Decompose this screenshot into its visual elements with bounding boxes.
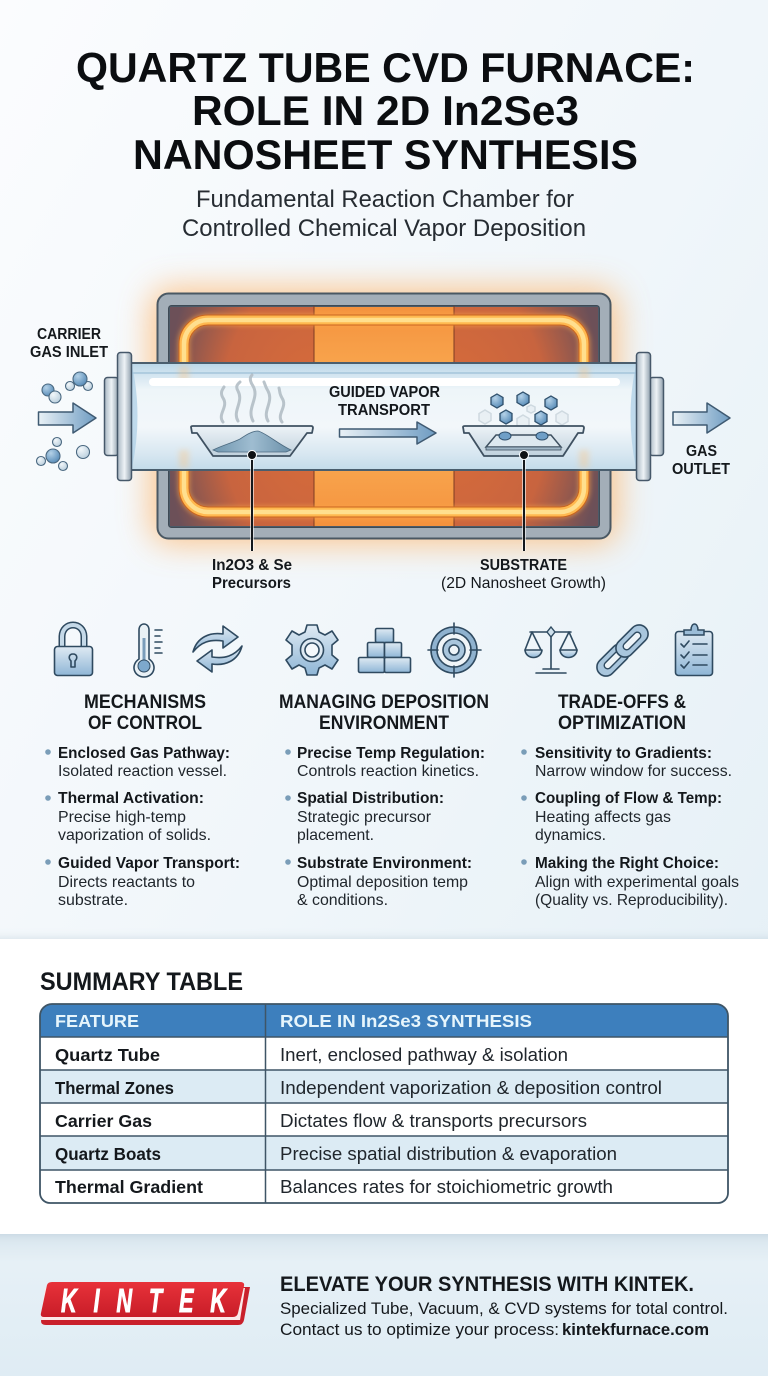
quartz tube xyxy=(130,363,638,470)
icon: gear xyxy=(286,625,338,675)
call to action: Contact us to optimize your process: xyxy=(280,1320,559,1339)
carrier gas inlet label xyxy=(30,326,108,361)
furnace diagram xyxy=(104,288,664,544)
summary table: Quartz Boats xyxy=(55,1144,161,1164)
list: trade-offs: Sensitivity to Gradients: xyxy=(535,745,712,762)
list: managing deposition: Strategic precursor xyxy=(297,809,432,826)
summary table: Inert, enclosed pathway & isolation xyxy=(280,1045,568,1065)
list: trade-offs: (Quality vs. Reproducibility). xyxy=(535,892,728,909)
icon: cycle arrows xyxy=(193,626,242,672)
list: managing deposition: placement. xyxy=(297,827,374,844)
heading: mechanisms: OF CONTROL xyxy=(88,713,202,734)
call to action: Specialized Tube, Vacuum, & CVD systems for total control. xyxy=(280,1299,728,1318)
logo: kintek xyxy=(41,1282,250,1325)
summary table: ROLE IN In2Se3 SYNTHESIS xyxy=(280,1011,532,1031)
icon: stacked blocks xyxy=(358,628,410,672)
precursor boat xyxy=(191,426,313,456)
icon: target xyxy=(428,623,481,677)
heating coil xyxy=(184,320,584,512)
logo: kintek: KINTEK xyxy=(61,1282,227,1319)
list: mechanisms: vaporization of solids. xyxy=(58,827,211,844)
icon: lock xyxy=(54,625,92,676)
carrier gas inlet label: GAS INLET xyxy=(30,344,108,361)
summary table xyxy=(40,1004,728,1203)
gas outlet label xyxy=(672,443,730,478)
guided vapor transport label: TRANSPORT xyxy=(338,402,430,419)
summary table: Quartz Tube xyxy=(55,1045,160,1065)
list: mechanisms: Enclosed Gas Pathway: xyxy=(58,745,230,762)
furnace body xyxy=(158,294,610,538)
callout: substrate: SUBSTRATE xyxy=(480,557,567,574)
gas molecules xyxy=(36,372,92,470)
call to action xyxy=(280,1273,728,1339)
heading: managing deposition: ENVIRONMENT xyxy=(319,713,449,734)
title: QUARTZ TUBE CVD FURNACE: xyxy=(76,44,695,91)
list: mechanisms: Precise high-temp xyxy=(58,809,186,826)
furnace glow xyxy=(150,288,618,544)
left flange xyxy=(104,352,132,480)
list: mechanisms: Guided Vapor Transport: xyxy=(58,855,240,872)
gas outlet label: GAS xyxy=(686,443,717,460)
heading: mechanisms xyxy=(84,692,206,734)
list: trade-offs: Making the Right Choice: xyxy=(535,855,719,872)
guided vapor transport label: GUIDED VAPOR xyxy=(329,384,440,401)
list: trade-offs: dynamics. xyxy=(535,827,606,844)
list: managing deposition: Substrate Environment: xyxy=(297,855,472,872)
list: trade-offs xyxy=(521,745,739,909)
list: mechanisms: Thermal Activation: xyxy=(58,790,204,807)
list: mechanisms xyxy=(45,745,240,909)
heading: trade-offs xyxy=(558,692,686,734)
summary table: Balances rates for stoichiometric growth xyxy=(280,1177,613,1197)
title xyxy=(76,44,695,178)
guided vapor transport label xyxy=(329,384,440,419)
steam wisps xyxy=(221,375,284,422)
panel: mechanisms of control xyxy=(45,692,240,909)
panel: managing deposition environment xyxy=(279,692,489,909)
gas outlet label: OUTLET xyxy=(672,461,730,478)
icon: thermometer xyxy=(134,624,162,677)
list: trade-offs: Coupling of Flow & Temp: xyxy=(535,790,722,807)
footer band xyxy=(0,1234,768,1376)
summary table: Dictates flow & transports precursors xyxy=(280,1111,587,1131)
list: mechanisms: Directs reactants to xyxy=(58,874,195,891)
list: managing deposition: Spatial Distribution: xyxy=(297,790,444,807)
title: NANOSHEET SYNTHESIS xyxy=(133,131,638,178)
callout: precursors: Precursors xyxy=(212,575,291,592)
list: mechanisms: Isolated reaction vessel. xyxy=(58,763,227,780)
call to action: kintekfurnace.com xyxy=(562,1320,709,1339)
list: trade-offs: Narrow window for success. xyxy=(535,763,732,780)
heading: summary table: SUMMARY TABLE xyxy=(40,968,243,996)
callout: precursors xyxy=(212,450,292,592)
panel: trade-offs and optimization xyxy=(521,692,739,909)
icon: balance scales xyxy=(525,627,577,673)
list: managing deposition: Precise Temp Regulation: xyxy=(297,745,485,762)
list: managing deposition: Controls reaction kinetics. xyxy=(297,763,479,780)
callout: precursors: In2O3 & Se xyxy=(212,557,292,574)
call to action: ELEVATE YOUR SYNTHESIS WITH KINTEK. xyxy=(280,1273,694,1296)
heading: trade-offs: TRADE-OFFS & xyxy=(558,692,686,713)
title: ROLE IN 2D In2Se3 xyxy=(192,87,579,134)
right flange xyxy=(636,352,664,480)
summary table: Carrier Gas xyxy=(55,1111,152,1131)
summary table: FEATURE xyxy=(55,1011,139,1031)
subtitle: Fundamental Reaction Chamber for xyxy=(196,186,574,213)
list: managing deposition: Optimal deposition temp xyxy=(297,874,468,891)
icon: chain link xyxy=(593,621,652,680)
heading: managing deposition: MANAGING DEPOSITION xyxy=(279,692,489,713)
summary table: Thermal Gradient xyxy=(55,1177,203,1197)
summary table: Thermal Zones xyxy=(55,1078,174,1098)
heading: managing deposition xyxy=(279,692,489,734)
substrate boat with nanosheets xyxy=(463,392,584,456)
inlet arrow xyxy=(38,403,96,433)
heading: trade-offs: OPTIMIZATION xyxy=(558,713,686,734)
heading: mechanisms: MECHANISMS xyxy=(84,692,206,713)
callout: substrate xyxy=(441,450,606,592)
icon: clipboard checklist xyxy=(676,624,712,676)
list: managing deposition xyxy=(285,745,485,909)
vapor transport arrow xyxy=(340,422,436,444)
summary table: Independent vaporization & deposition control xyxy=(280,1078,662,1098)
list: mechanisms: substrate. xyxy=(58,892,128,909)
summary table: Precise spatial distribution & evaporation xyxy=(280,1144,617,1164)
callout: substrate: (2D Nanosheet Growth) xyxy=(441,575,606,592)
list: trade-offs: Align with experimental goals xyxy=(535,874,739,891)
list: managing deposition: & conditions. xyxy=(297,892,388,909)
list: trade-offs: Heating affects gas xyxy=(535,809,671,826)
subtitle: Controlled Chemical Vapor Deposition xyxy=(182,215,586,242)
subtitle xyxy=(182,186,586,242)
carrier gas inlet label: CARRIER xyxy=(37,326,101,343)
panel: summary band xyxy=(0,939,768,1234)
outlet arrow xyxy=(673,403,730,433)
